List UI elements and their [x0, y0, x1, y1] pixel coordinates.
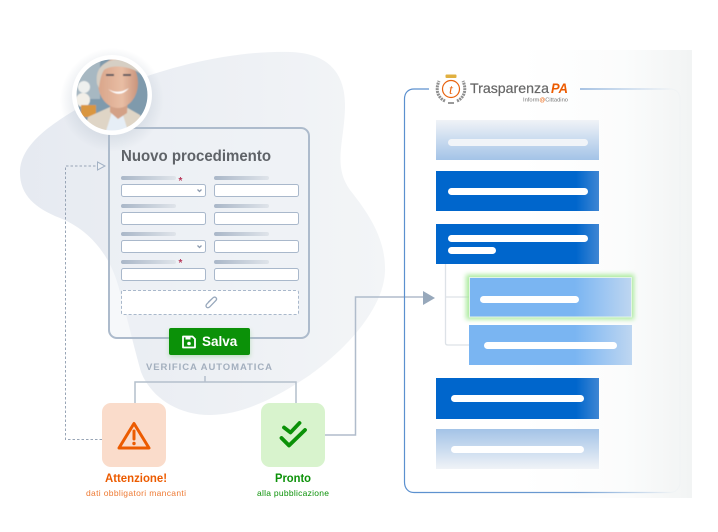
logo: Inform@Cittadino	[523, 98, 568, 104]
dropdown chevrons	[198, 190, 202, 248]
form heading: Nuovo procedimento	[121, 148, 271, 165]
icon tile: warning	[102, 403, 166, 467]
arrow: publish	[325, 291, 435, 435]
portal bar 1	[436, 120, 599, 160]
icon: paperclip	[206, 297, 217, 308]
required asterisks: *	[178, 258, 182, 269]
form fields right column	[214, 184, 298, 280]
icon tile: double check	[261, 403, 325, 467]
ready title: Pronto	[275, 471, 311, 485]
ready caption: alla pubblicazione	[257, 488, 329, 498]
background blob	[20, 52, 385, 415]
portal bar 2	[436, 171, 599, 211]
logo: PA	[551, 80, 568, 96]
warning caption: dati obbligatori mancanti	[86, 488, 186, 498]
warning title: Attenzione!	[105, 471, 167, 485]
portal child highlighted	[466, 274, 634, 320]
icon: laurel emblem: t	[449, 83, 454, 98]
panel: portal frame	[404, 89, 680, 492]
connector: verification branches	[135, 376, 296, 403]
tree connector	[446, 264, 469, 345]
save button: Salva	[202, 334, 238, 349]
verification label: VERIFICA AUTOMATICA	[146, 362, 272, 373]
status: warning	[86, 403, 186, 498]
portal bar 4	[436, 378, 599, 419]
dashed return arrow	[66, 162, 105, 440]
attachment box	[122, 290, 298, 314]
portrait	[66, 54, 156, 144]
portal child	[469, 325, 632, 365]
form fields left column	[122, 184, 206, 280]
icon: floppy disk	[183, 336, 195, 348]
panel: form	[109, 128, 309, 338]
logo	[437, 74, 568, 104]
save button	[169, 328, 250, 357]
required asterisks	[178, 176, 182, 269]
required asterisks: *	[178, 176, 182, 187]
status: ready	[257, 403, 329, 498]
logo wordmark: Trasparenza	[470, 80, 549, 96]
portal bar 5	[436, 429, 599, 469]
right background panel	[520, 50, 692, 498]
portal bar 3	[436, 224, 599, 264]
field labels	[121, 176, 269, 264]
